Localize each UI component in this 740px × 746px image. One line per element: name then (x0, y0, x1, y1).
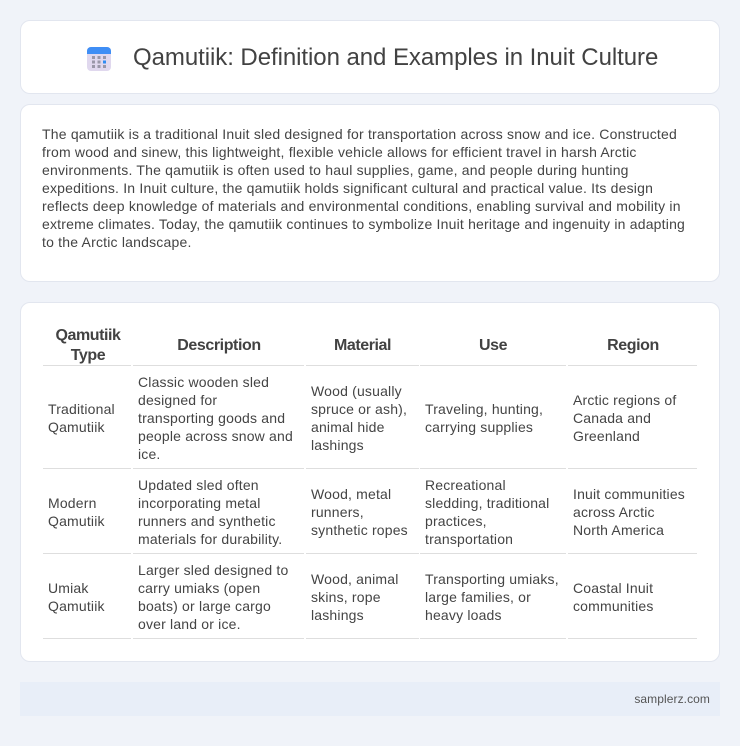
intro paragraph (42, 126, 685, 250)
icon: calendar (87, 47, 111, 71)
title: Qamutiik: Definition and Examples in Inuit Culture (133, 44, 658, 71)
row: Traditional Qamutiik: Greenland (573, 428, 640, 444)
row: Traditional Qamutiik: Classic wooden sled (138, 374, 269, 390)
row: Traditional Qamutiik: Canada and (573, 410, 651, 426)
row: Modern Qamutiik: North America (573, 522, 664, 538)
row: Umiak Qamutiik: lashings (311, 607, 364, 623)
row: Umiak Qamutiik: communities (573, 598, 654, 614)
row: Traditional Qamutiik: ice. (138, 446, 161, 462)
footer bar (20, 682, 720, 716)
row: Umiak Qamutiik (43, 553, 697, 639)
row: Umiak Qamutiik: Umiak (48, 580, 89, 596)
row: Modern Qamutiik: Modern (48, 495, 97, 511)
intro paragraph: extreme climates. Today, the qamutiik continues to symbolize Inuit heritage and ingenuity in adapting (42, 216, 685, 232)
row: Umiak Qamutiik: large families, or (425, 589, 531, 605)
row: Traditional Qamutiik: animal hide (311, 419, 385, 435)
row: Umiak Qamutiik: Larger sled designed to (138, 562, 288, 578)
row: Traditional Qamutiik: lashings (311, 437, 364, 453)
row: Modern Qamutiik: runners and synthetic (138, 513, 276, 529)
row: Modern Qamutiik: practices, (425, 513, 487, 529)
row: Modern Qamutiik: Wood, metal (311, 486, 391, 502)
intro paragraph: reflects deep knowledge of materials and environmental conditions, enabling survival and mobility in (42, 198, 681, 214)
row: Modern Qamutiik: transportation (425, 531, 513, 547)
table header: Material (334, 337, 391, 354)
row: Umiak Qamutiik: Qamutiik (48, 598, 105, 614)
row: Traditional Qamutiik: Qamutiik (48, 419, 105, 435)
table header: Qamutiik (55, 327, 121, 344)
table header: Use (479, 337, 507, 354)
row: Umiak Qamutiik: boats) or large cargo (138, 598, 271, 614)
row: Modern Qamutiik: runners, (311, 504, 364, 520)
row: Modern Qamutiik: Qamutiik (48, 513, 105, 529)
intro paragraph: from wood and sinew, this lightweight, flexible vehicle allows for efficient travel in harsh Arctic (42, 144, 637, 160)
row: Traditional Qamutiik: carrying supplies (425, 419, 533, 435)
row: Traditional Qamutiik: Traveling, hunting, (425, 401, 543, 417)
intro paragraph: environments. The qamutiik is often used to haul supplies, game, and people during hunting (42, 162, 629, 178)
row: Traditional Qamutiik: transporting goods and (138, 410, 285, 426)
footer credit: samplerz.com (634, 692, 710, 706)
row: Modern Qamutiik: Updated sled often (138, 477, 259, 493)
title card (20, 20, 720, 94)
row: Modern Qamutiik (43, 468, 697, 547)
row: Traditional Qamutiik: Traditional (48, 401, 115, 417)
row: Traditional Qamutiik: Wood (usually (311, 383, 402, 399)
row: Traditional Qamutiik: people across snow and (138, 428, 293, 444)
row: Umiak Qamutiik: carry umiaks (open (138, 580, 260, 596)
row: Modern Qamutiik: across Arctic (573, 504, 655, 520)
row: Modern Qamutiik: sledding, traditional (425, 495, 549, 511)
row: Modern Qamutiik: materials for durability. (138, 531, 282, 547)
table panel (20, 302, 720, 662)
row: Traditional Qamutiik: spruce or ash), (311, 401, 407, 417)
intro paragraph: The qamutiik is a traditional Inuit sled designed for transportation across snow and ice. Constructed (42, 126, 677, 142)
row: Modern Qamutiik: Recreational (425, 477, 506, 493)
row: Traditional Qamutiik (43, 365, 697, 462)
intro text panel (20, 104, 720, 282)
table header: Description (177, 337, 261, 354)
intro paragraph: expeditions. In Inuit culture, the qamutiik holds significant cultural and practical value. Its design (42, 180, 653, 196)
table header: Region (607, 337, 659, 354)
row: Umiak Qamutiik: skins, rope (311, 589, 381, 605)
row: Modern Qamutiik: Inuit communities (573, 486, 685, 502)
table header (55, 327, 659, 364)
row: Umiak Qamutiik: Coastal Inuit (573, 580, 653, 596)
row: Modern Qamutiik: incorporating metal (138, 495, 260, 511)
row: Umiak Qamutiik: over land or ice. (138, 616, 241, 632)
row: Traditional Qamutiik: Arctic regions of (573, 392, 676, 408)
row: Umiak Qamutiik: Wood, animal (311, 571, 398, 587)
row: Umiak Qamutiik: Transporting umiaks, (425, 571, 559, 587)
table header: Type (71, 347, 105, 364)
intro paragraph: to the Arctic landscape. (42, 234, 192, 250)
row: Umiak Qamutiik: heavy loads (425, 607, 502, 623)
row: Modern Qamutiik: synthetic ropes (311, 522, 408, 538)
row: Traditional Qamutiik: designed for (138, 392, 217, 408)
